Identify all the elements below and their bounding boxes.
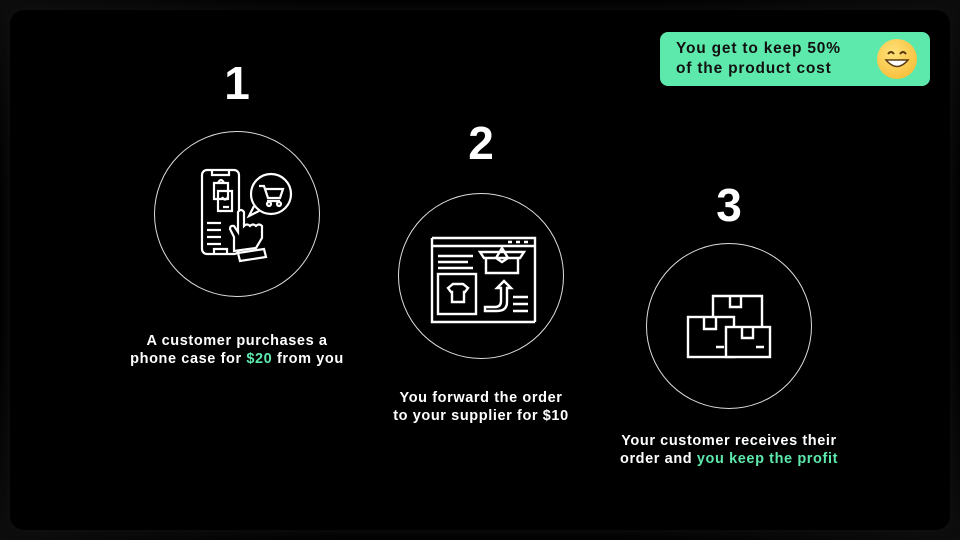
icon: grinning emoji	[877, 39, 917, 79]
callout	[660, 32, 930, 86]
circle 1 with icon: phone shopping	[154, 131, 320, 297]
callout text	[676, 40, 841, 77]
number 3: 3	[716, 179, 742, 231]
number 2: 2	[468, 117, 494, 169]
caption 3: Your customer receives their	[621, 433, 837, 449]
callout text: You get to keep 50%	[676, 40, 841, 57]
caption 2: to your supplier for $10	[393, 408, 569, 424]
caption 3	[620, 433, 838, 467]
caption 2: You forward the order	[400, 390, 562, 406]
caption 1: A customer purchases a	[146, 333, 328, 349]
caption 3: order and you keep the profit	[620, 451, 838, 467]
callout text: of the product cost	[676, 60, 832, 77]
number 1: 1	[224, 57, 250, 109]
circle 2 with icon: web order	[398, 193, 564, 359]
caption 1: phone case for $20 from you	[130, 351, 344, 367]
circle 3 with icon: boxes	[646, 243, 812, 409]
caption 2	[393, 390, 569, 424]
caption 1	[130, 333, 344, 367]
